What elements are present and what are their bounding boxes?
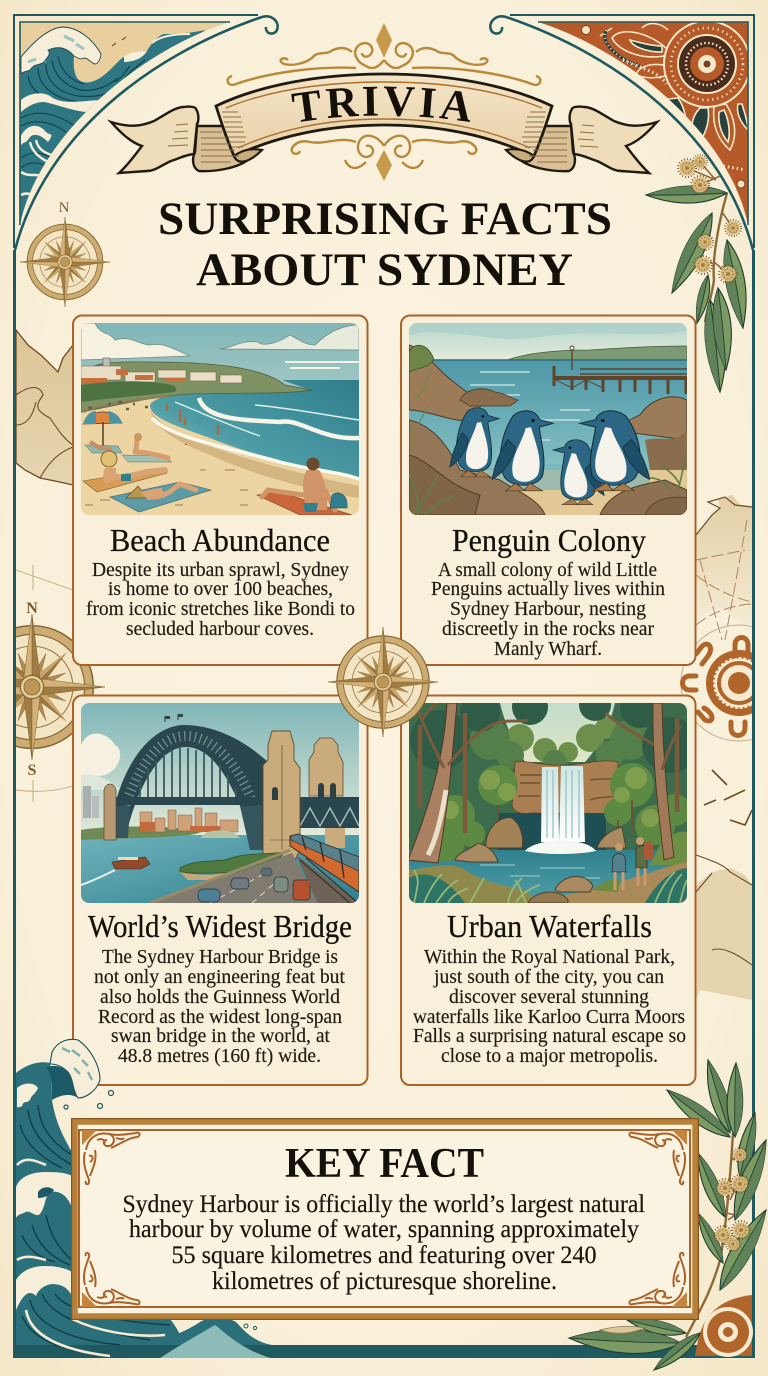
illustration: harbour bridge	[81, 703, 359, 903]
body text: Despite its urban sprawl, Sydney	[92, 559, 349, 581]
card: Penguin Colony	[401, 316, 696, 665]
ribbon centre band	[216, 74, 552, 156]
body text: discreetly in the rocks near	[442, 618, 654, 640]
ribbon tail left	[111, 107, 198, 173]
illustration: beach	[81, 323, 359, 515]
body text: not only an engineering feat but	[94, 966, 345, 988]
illustration: penguins	[409, 323, 687, 515]
corner: bottom-right aboriginal panel	[695, 1295, 753, 1357]
body text: Penguins actually lives within	[431, 578, 665, 600]
body text: from iconic stretches like Bondi to	[86, 598, 355, 620]
body text	[431, 559, 665, 660]
card: Urban Waterfalls	[401, 688, 698, 1085]
ribbon banner	[107, 72, 661, 174]
ribbon fold right	[518, 126, 575, 171]
body text: Falls a surprising natural escape so	[413, 1025, 686, 1047]
heading: World’s Widest Bridge	[88, 909, 352, 944]
eucalyptus sprig: top right	[646, 155, 753, 393]
compass letter N: N	[26, 600, 38, 617]
body text: waterfalls like Karloo Curra Moors	[413, 1006, 685, 1028]
banner flourish top	[228, 23, 540, 85]
map fragment: left	[16, 330, 73, 802]
body text: also holds the Guinness World	[100, 986, 340, 1008]
body text: swan bridge in the world, at	[111, 1025, 330, 1047]
key fact body: harbour by volume of water, spanning approximately	[129, 1214, 639, 1243]
aboriginal dot circle: right	[680, 624, 752, 742]
compass letter N top: N	[59, 200, 70, 216]
heading: Penguin Colony	[452, 523, 646, 558]
illustration: waterfall	[409, 703, 687, 903]
banner flourish bottom	[292, 136, 476, 181]
key fact panel	[72, 1119, 698, 1319]
key fact body: kilometres of picturesque shoreline.	[212, 1266, 557, 1295]
body text: Within the Royal National Park,	[424, 946, 675, 968]
ribbon fold left	[193, 126, 250, 171]
main title: SURPRISING FACTS	[158, 193, 612, 245]
body text: The Sydney Harbour Bridge is	[102, 946, 338, 968]
main title: ABOUT SYDNEY	[196, 244, 573, 296]
compass letter S: S	[28, 762, 37, 779]
compass rose: left	[16, 602, 105, 760]
body text: is home to over 100 beaches,	[108, 578, 333, 600]
card: World's Widest Bridge	[73, 696, 368, 1085]
ribbon rolls	[234, 149, 534, 162]
body text: Sydney Harbour, nesting	[450, 598, 646, 620]
card: Beach Abundance	[73, 316, 368, 665]
compass rose: centre	[328, 627, 438, 737]
key fact body	[122, 1189, 645, 1295]
corner: top-right aboriginal panel	[540, 22, 748, 222]
body text: A small colony of wild Little	[438, 559, 657, 581]
map fragment: right	[696, 495, 752, 1000]
heading: Beach Abundance	[110, 523, 330, 558]
body text: close to a major metropolis.	[441, 1045, 658, 1067]
body text	[86, 559, 355, 640]
key fact body: Sydney Harbour is officially the world’s largest natural	[122, 1189, 645, 1218]
body text: Record as the widest long-span	[98, 1006, 342, 1028]
body text: discover several stunning	[449, 986, 649, 1008]
body text: just south of the city, you can	[433, 966, 664, 988]
corner ornaments	[82, 1130, 687, 1307]
key fact body: 55 square kilometres and featuring over 240	[172, 1240, 596, 1269]
body text: 48.8 metres (160 ft) wide.	[118, 1045, 321, 1067]
body text	[94, 946, 345, 1067]
heading: Urban Waterfalls	[447, 909, 652, 944]
eucalyptus sprig: bottom right	[568, 1058, 768, 1375]
body text	[413, 946, 686, 1067]
waves: bottom-left corner	[16, 1039, 755, 1358]
banner label: TRIVIA	[291, 86, 470, 122]
body text: Manly Wharf.	[494, 638, 602, 660]
key fact heading: KEY FACT	[285, 1141, 484, 1187]
ribbon tail right	[570, 107, 657, 173]
compass rose: top left	[20, 200, 110, 307]
body text: secluded harbour coves.	[126, 618, 314, 640]
main title	[158, 193, 612, 296]
corner: top-left wave panel	[20, 22, 228, 222]
